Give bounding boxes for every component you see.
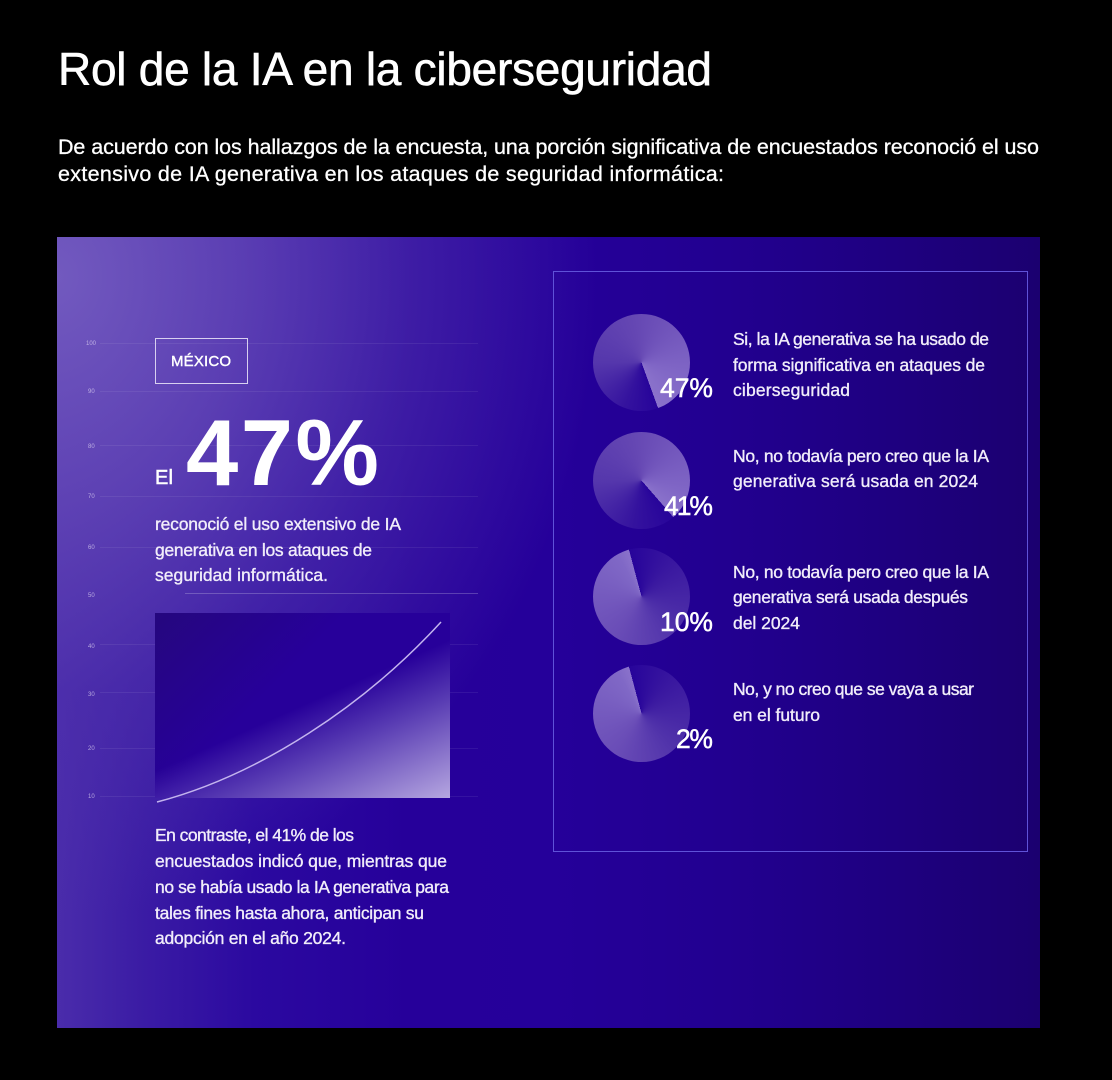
answer 3: 10% bbox=[660, 607, 713, 637]
text: contrast paragraph bbox=[155, 825, 449, 948]
axis grid background: 70 bbox=[88, 494, 95, 500]
text: contrast paragraph: no se había usado la IA generativa para bbox=[155, 877, 449, 897]
answer 3: No, no todavía pero creo que la IA bbox=[733, 562, 989, 582]
answer 2: No, no todavía pero creo que la IA bbox=[733, 446, 989, 466]
text: stat description bbox=[155, 514, 401, 585]
axis grid background: 20 bbox=[88, 746, 95, 752]
answer 2 bbox=[664, 446, 989, 521]
panel: main gradient background bbox=[57, 237, 1040, 1028]
text: contrast paragraph: En contraste, el 41% de los bbox=[155, 825, 354, 845]
text: contrast paragraph: tales fines hasta ahora, anticipan su bbox=[155, 903, 424, 923]
big stat: 47%: El bbox=[155, 467, 173, 489]
answer 2: 41% bbox=[664, 491, 713, 521]
axis grid background: 30 bbox=[88, 692, 95, 698]
big stat: 47%: 47% bbox=[186, 400, 379, 505]
text: stat description: generativa en los ataques de bbox=[155, 540, 372, 560]
answer 1: 47% bbox=[660, 373, 713, 403]
text: contrast paragraph: encuestados indicó que, mientras que bbox=[155, 851, 447, 871]
icon: pie chart 10% bbox=[592, 548, 690, 644]
axis grid background: 90 bbox=[88, 389, 95, 395]
answer 4: en el futuro bbox=[733, 705, 820, 725]
badge: México bbox=[156, 338, 248, 384]
answer 1: Si, la IA generativa se ha usado de bbox=[733, 329, 989, 349]
answer 3: del 2024 bbox=[733, 613, 800, 633]
axis grid background: 100 bbox=[86, 341, 97, 347]
answer 4: No, y no creo que se vaya a usar bbox=[733, 679, 974, 699]
axis grid background: 60 bbox=[88, 545, 95, 551]
text: stat description: reconoció el uso extensivo de IA bbox=[155, 514, 401, 534]
text: contrast paragraph: adopción en el año 2024. bbox=[155, 928, 346, 948]
answer 1: forma significativa en ataques de bbox=[733, 355, 985, 375]
panel: survey answers frame bbox=[553, 271, 1028, 852]
answer 1 bbox=[660, 329, 989, 403]
axis grid background: 40 bbox=[88, 644, 95, 650]
chart: area gradient background bbox=[155, 613, 450, 798]
axis grid background: 80 bbox=[88, 444, 95, 450]
answer 4: 2% bbox=[676, 724, 713, 754]
icon: pie chart 41% bbox=[592, 432, 690, 528]
intro text: De acuerdo con los hallazgos de la encuesta, una porción significativa de encuestados reconoció el uso bbox=[58, 135, 1039, 159]
title: Rol de la IA en la ciberseguridad bbox=[58, 43, 712, 95]
answer 2: generativa será usada en 2024 bbox=[733, 471, 978, 491]
answer 3: generativa será usada después bbox=[733, 587, 968, 607]
intro text bbox=[58, 135, 1039, 186]
axis grid background: 10 bbox=[88, 794, 95, 800]
icon: pie chart 47% bbox=[592, 314, 690, 411]
badge: México: MÉXICO bbox=[171, 353, 231, 370]
axis grid background: 50 bbox=[88, 593, 95, 599]
intro text: extensivo de IA generativa en los ataques de seguridad informática: bbox=[58, 162, 724, 186]
answer 4 bbox=[676, 679, 974, 754]
chart: growth curve bbox=[157, 622, 441, 802]
text: stat description: seguridad informática. bbox=[155, 565, 328, 585]
answer 3 bbox=[660, 562, 989, 637]
answer 1: ciberseguridad bbox=[733, 380, 850, 400]
icon: pie chart 2% bbox=[592, 664, 690, 762]
